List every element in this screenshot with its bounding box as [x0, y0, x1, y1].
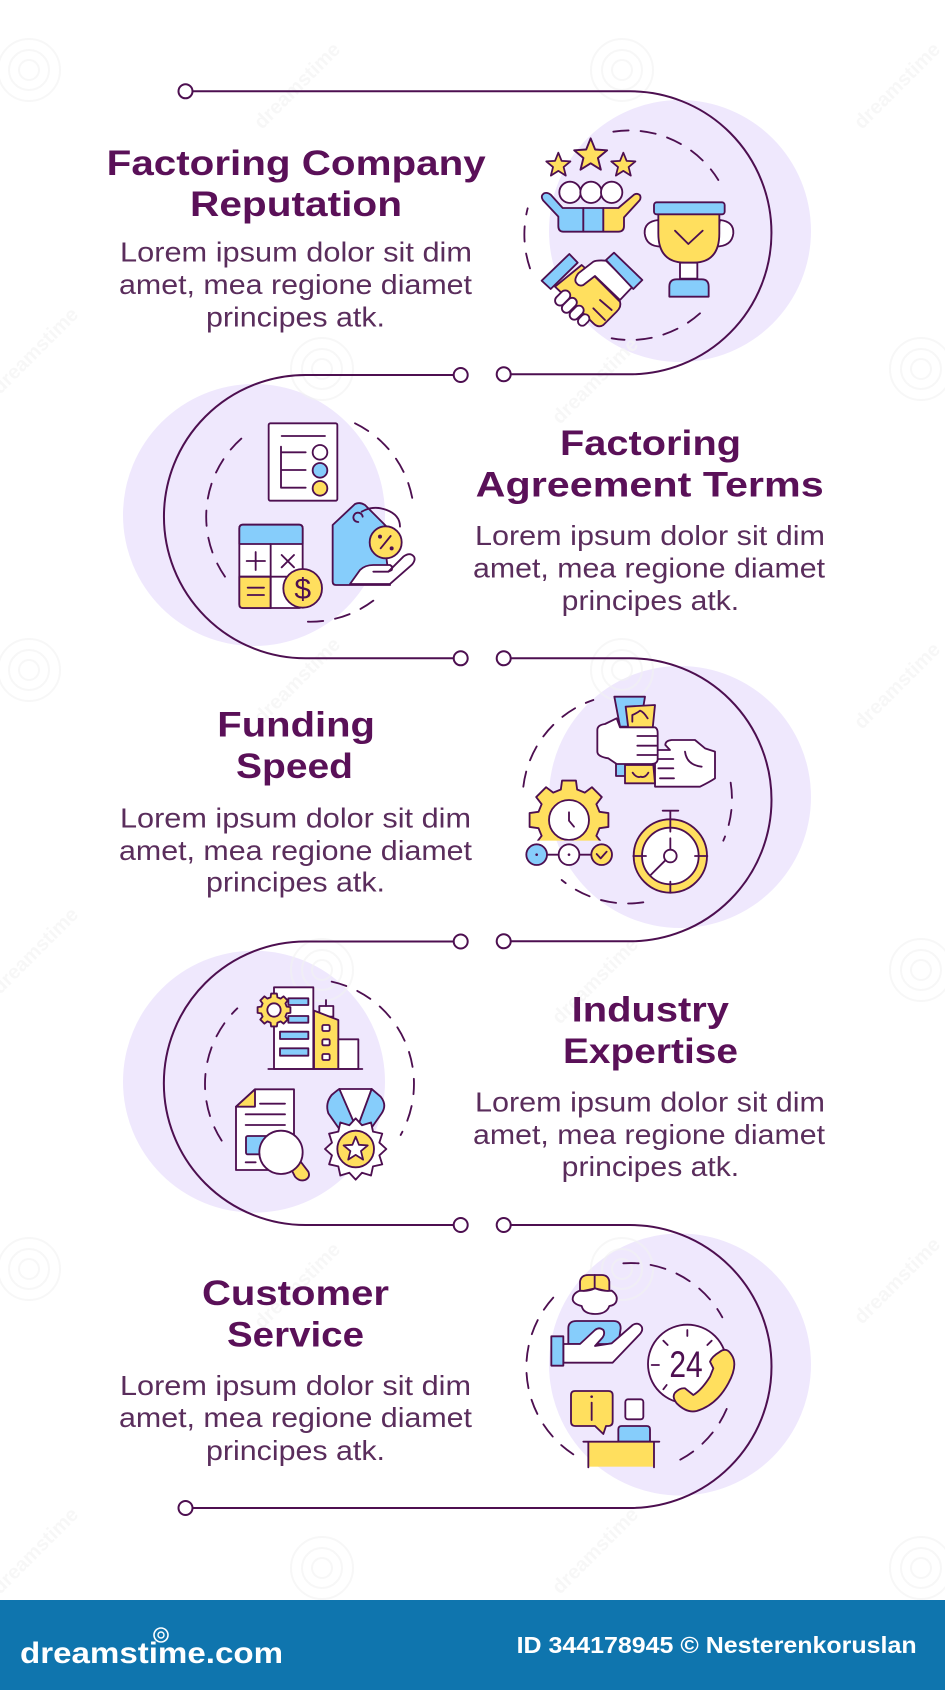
- heading: Factoring Company Reputation: Reputation: [190, 185, 402, 224]
- text block: row 1: Lorem ipsum dolor sit dim: [120, 237, 472, 268]
- icon group: customer service (agent, 24h phone, info desk): [526, 1263, 734, 1467]
- heading: Factoring Agreement Terms: [476, 424, 824, 505]
- watermark pattern: dreamstime: [850, 639, 945, 734]
- connector: row 5: [178, 1218, 772, 1515]
- lavender blob: row 3: [549, 666, 811, 928]
- text block: row 2: amet, mea regione diamet: [473, 553, 825, 584]
- watermark pattern: dreamstime: [250, 1239, 345, 1334]
- icon group: industry expertise (building, document search, medal): [205, 982, 414, 1180]
- lavender blob: row 5: [549, 1234, 811, 1496]
- text block: row 3: principes atk.: [206, 867, 385, 898]
- icon group: agreement terms (list, calculator, discount tag): $: [294, 573, 311, 606]
- text block: row 5: principes atk.: [206, 1435, 385, 1466]
- heading: Industry Expertise: Expertise: [563, 1032, 738, 1071]
- text block: row 1: amet, mea regione diamet: [119, 269, 472, 300]
- heading: Factoring Company Reputation: [107, 144, 486, 224]
- text block: row 5: [119, 1370, 472, 1466]
- icon group: customer service (agent, 24h phone, info desk): 24: [669, 1343, 703, 1385]
- heading: Customer Service: Service: [227, 1316, 364, 1355]
- text block: row 1: [119, 237, 472, 333]
- text block: row 3: Lorem ipsum dolor sit dim: [120, 803, 471, 834]
- icon group: funding speed (money hands, gear clock, stopwatch): [523, 697, 732, 904]
- icon group: reputation (stars, team, trophy, handshake): [524, 130, 733, 340]
- connector: row 1: [178, 84, 771, 381]
- heading: Funding Speed: Funding: [217, 706, 375, 745]
- heading: Factoring Agreement Terms: Agreement Terms: [476, 466, 824, 505]
- heading: Funding Speed: Speed: [236, 747, 353, 786]
- heading: Customer Service: [202, 1274, 389, 1355]
- heading: Factoring Company Reputation: Factoring Company: [107, 144, 486, 183]
- heading: Customer Service: Customer: [202, 1274, 389, 1313]
- footer bar: [0, 1600, 945, 1690]
- icon group: agreement terms (list, calculator, discount tag): [206, 423, 415, 622]
- watermark pattern: dreamstime: [548, 934, 643, 1029]
- footer bar: ID 344178945 © Nesterenkoruslan: [517, 1632, 917, 1658]
- connector: row 3: [497, 651, 772, 948]
- heading: Funding Speed: [217, 706, 375, 786]
- heading: Industry Expertise: Industry: [572, 991, 730, 1030]
- text block: row 1: principes atk.: [206, 302, 385, 333]
- text block: row 3: [119, 803, 472, 898]
- watermark pattern: dreamstime: [850, 1234, 945, 1329]
- text block: row 4: amet, mea regione diamet: [473, 1119, 825, 1150]
- text block: row 2: [473, 520, 825, 616]
- watermark pattern: dreamstime: [250, 39, 345, 134]
- text block: row 4: [473, 1087, 825, 1182]
- text block: row 4: Lorem ipsum dolor sit dim: [475, 1087, 825, 1118]
- watermark pattern: dreamstime: [250, 634, 345, 729]
- heading: Factoring Agreement Terms: Factoring: [560, 424, 741, 463]
- heading: Industry Expertise: [563, 991, 738, 1071]
- connector: row 4: [164, 934, 468, 1232]
- connector: row 2: [164, 368, 468, 665]
- lavender blob: row 4: [123, 951, 385, 1213]
- watermark pattern: dreamstime: [548, 334, 643, 429]
- text block: row 5: amet, mea regione diamet: [119, 1402, 472, 1433]
- lavender blob: row 2: [123, 384, 385, 646]
- text block: row 2: principes atk.: [562, 585, 739, 616]
- lavender blob: row 1: [549, 100, 811, 362]
- footer bar: dreamstime.com: [20, 1637, 283, 1670]
- text block: row 4: principes atk.: [562, 1151, 739, 1182]
- text block: row 2: Lorem ipsum dolor sit dim: [475, 520, 825, 551]
- watermark pattern: dreamstime: [548, 1504, 643, 1599]
- text block: row 3: amet, mea regione diamet: [119, 835, 472, 866]
- text block: row 5: Lorem ipsum dolor sit dim: [120, 1370, 471, 1401]
- watermark pattern: dreamstime: [850, 39, 945, 134]
